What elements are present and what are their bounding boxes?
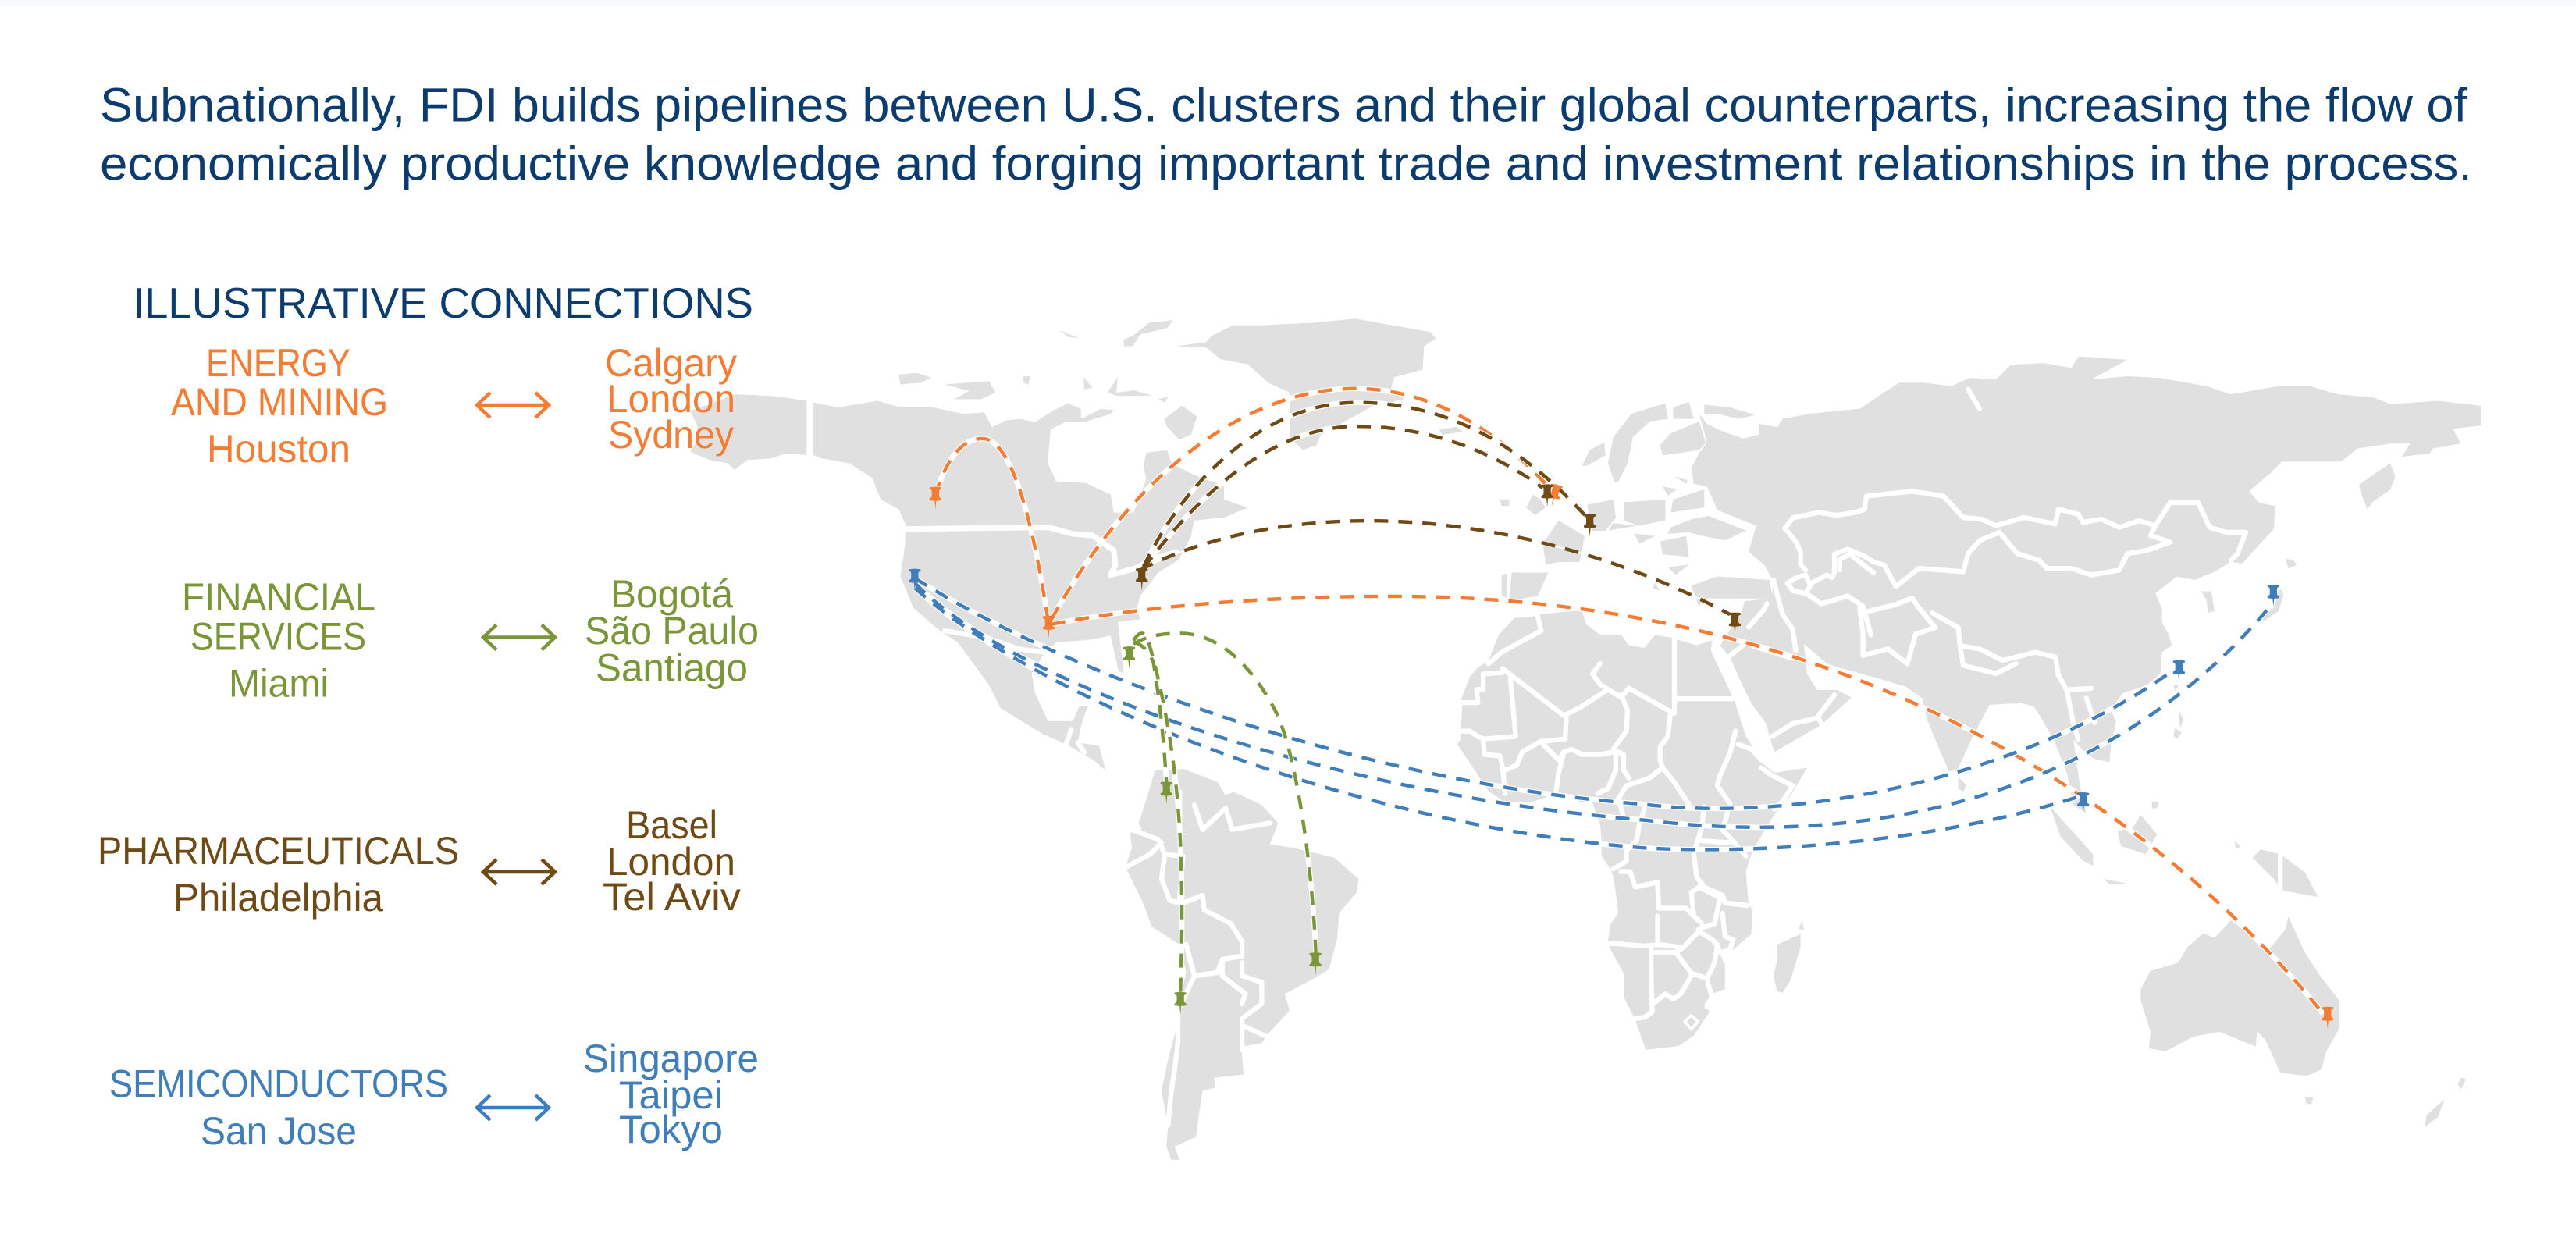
pin: Singapore xyxy=(2077,792,2089,815)
connection arcs: semiconductors xyxy=(915,578,2268,849)
connection arcs: pharmaceuticals xyxy=(1140,403,1730,614)
legend row: pharmaceuticals: PHARMACEUTICALS xyxy=(98,829,459,873)
pin: Tel Aviv xyxy=(1729,613,1741,635)
title: economically productive knowledge and forging important trade and investment relationships in the process. xyxy=(100,137,2472,190)
legend row: financial services xyxy=(182,572,759,706)
world map with connection arcs xyxy=(690,318,2481,1160)
legend row: semiconductors: Singapore xyxy=(583,1037,759,1080)
legend row: financial services: Bogotá xyxy=(610,572,733,616)
africa xyxy=(1457,610,1807,1050)
pin: Basel xyxy=(1584,514,1596,536)
legend row: energy and mining xyxy=(171,341,737,471)
legend row: pharmaceuticals: Basel xyxy=(626,803,717,847)
land masses xyxy=(690,318,2481,1160)
pin: San Jose xyxy=(909,569,920,591)
legend row: energy and mining: AND MINING xyxy=(171,380,388,424)
legend row: financial services: FINANCIAL xyxy=(182,575,375,619)
legend row: energy and mining: Calgary xyxy=(605,341,737,385)
pin: Miami xyxy=(1123,646,1135,669)
legend row: pharmaceuticals: London xyxy=(607,840,735,884)
location pins xyxy=(909,483,2333,1030)
oceania and asian islands xyxy=(2140,916,2339,1076)
connection arcs: financial services xyxy=(1133,633,1316,995)
title: Subnationally, FDI builds pipelines between U.S. clusters and their global counterparts, increasing the flow of xyxy=(100,78,2468,131)
pin: London energy xyxy=(1546,483,1563,508)
legend row: financial services: Santiago xyxy=(596,646,748,690)
pin: Sao Paulo xyxy=(1310,952,1322,975)
europe xyxy=(1500,500,1509,506)
legend row: energy and mining: London xyxy=(607,377,735,421)
pin: Bogota xyxy=(1161,781,1172,804)
pin: Sydney xyxy=(2322,1007,2333,1030)
heading: illustrative connections: ILLUSTRATIVE CONNECTIONS xyxy=(133,279,753,327)
legend row: semiconductors: San Jose xyxy=(201,1109,357,1153)
pin: Tokyo xyxy=(2268,585,2279,607)
connection arcs: energy and mining xyxy=(938,389,2323,1014)
legend row: semiconductors: Taipei xyxy=(619,1073,723,1117)
arrow: energy xyxy=(477,393,549,418)
legend row: semiconductors: SEMICONDUCTORS xyxy=(109,1062,448,1105)
pin: Calgary xyxy=(930,487,941,509)
legend row: energy and mining: Houston xyxy=(207,427,350,471)
arrow: financial xyxy=(483,624,555,649)
arrow: pharmaceuticals xyxy=(483,859,555,884)
arrow: semiconductors xyxy=(477,1095,549,1120)
legend row: pharmaceuticals xyxy=(98,803,741,920)
pin: Taipei xyxy=(2173,660,2185,682)
legend row: financial services: SERVICES xyxy=(190,615,366,659)
legend row: pharmaceuticals: Tel Aviv xyxy=(603,875,741,919)
legend row: pharmaceuticals: Philadelphia xyxy=(173,876,383,920)
legend row: energy and mining: Sydney xyxy=(608,413,734,457)
south america xyxy=(1126,769,1359,1160)
legend row: semiconductors xyxy=(109,1037,759,1153)
title xyxy=(100,78,2472,190)
pin: London pharmaceuticals xyxy=(1542,484,1553,507)
legend row: financial services: São Paulo xyxy=(585,609,759,653)
legend row: energy and mining: ENERGY xyxy=(206,341,350,385)
pin: Santiago xyxy=(1175,992,1187,1015)
legend row: financial services: Miami xyxy=(229,662,329,706)
country borders xyxy=(810,390,2280,1126)
pin: Philadelphia xyxy=(1136,568,1147,591)
eurasia mainland xyxy=(1692,357,2481,813)
legend row: semiconductors: Tokyo xyxy=(619,1108,723,1151)
pin: Houston xyxy=(1043,616,1055,639)
